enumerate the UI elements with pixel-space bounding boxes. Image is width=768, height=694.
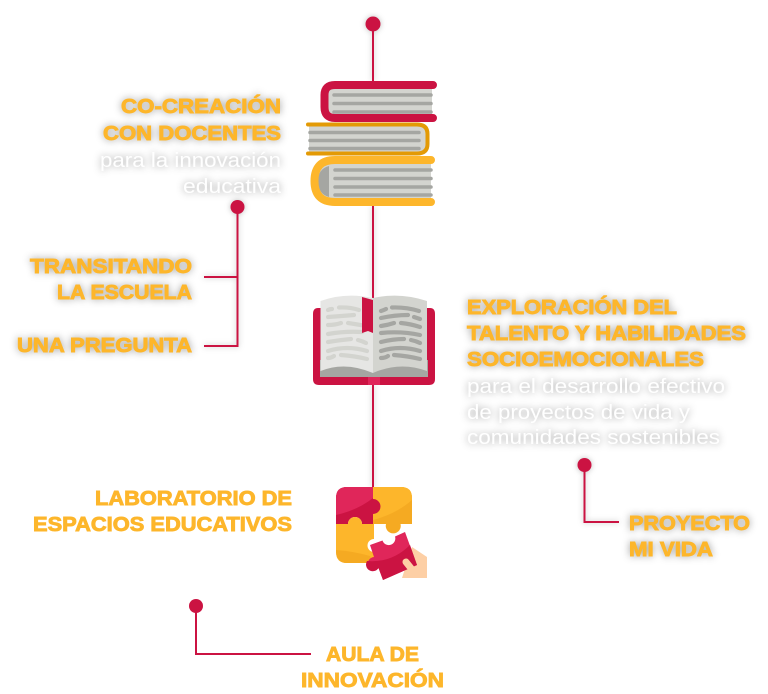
text: co-creación con docentes: educativa — [183, 176, 282, 198]
left page text — [328, 307, 367, 359]
icon: puzzle with hand — [336, 487, 427, 580]
left page — [320, 296, 373, 373]
connector: bottom branch — [189, 599, 311, 654]
yellow book — [314, 160, 431, 202]
text: co-creación con docentes: para la innovación — [100, 150, 281, 172]
text: exploración del talento: SOCIOEMOCIONALES — [467, 348, 704, 371]
label: laboratorio de espacios educativos — [33, 487, 292, 536]
orange book — [308, 124, 428, 154]
red book — [324, 85, 433, 118]
label: aula de innovación: INNOVACIÓN — [301, 668, 444, 692]
icon: stack of books — [308, 85, 433, 202]
top right piece — [373, 487, 412, 533]
text: exploración del talento: EXPLORACIÓN DEL — [467, 295, 677, 319]
label: aula de innovación — [301, 643, 444, 692]
label: laboratorio de espacios educativos: LABORATORIO DE — [95, 487, 292, 510]
right page — [373, 296, 427, 373]
connector: right branch — [578, 458, 619, 522]
book cover — [313, 308, 435, 385]
loose piece — [368, 532, 417, 580]
label: una pregunta: UNA PREGUNTA — [17, 334, 192, 357]
top left piece — [336, 487, 381, 524]
text: exploración del talento: TALENTO Y HABILIDADES — [467, 322, 746, 345]
label: proyecto mi vida: PROYECTO — [629, 512, 750, 535]
icon: open book — [313, 296, 435, 385]
text: co-creación con docentes: CO-CREACIÓN — [121, 94, 281, 118]
label: proyecto mi vida — [629, 512, 750, 561]
thumb — [406, 562, 414, 572]
hand — [402, 547, 427, 578]
label: aula de innovación: AULA DE — [326, 643, 419, 666]
text: exploración del talento: para el desarrollo efectivo — [467, 376, 725, 398]
page shadow — [320, 360, 428, 377]
text: co-creación con docentes: CON DOCENTES — [103, 122, 281, 145]
label: proyecto mi vida: MI VIDA — [629, 538, 713, 561]
right page text — [381, 307, 420, 359]
label: laboratorio de espacios educativos: ESPACIOS EDUCATIVOS — [33, 513, 292, 536]
text: co-creación con docentes — [100, 94, 282, 198]
label: transitando la escuela: TRANSITANDO — [30, 255, 192, 278]
text: exploración del talento: de proyectos de vida y — [467, 402, 690, 424]
label: transitando la escuela — [30, 255, 192, 304]
label: transitando la escuela: LA ESCUELA — [57, 281, 192, 304]
text: exploración del talento — [467, 295, 746, 449]
connector: top left branch — [204, 200, 244, 346]
text: exploración del talento: comunidades sostenibles — [467, 427, 720, 449]
central timeline — [366, 16, 380, 488]
bottom left piece — [336, 517, 374, 563]
bookmark — [362, 297, 373, 333]
